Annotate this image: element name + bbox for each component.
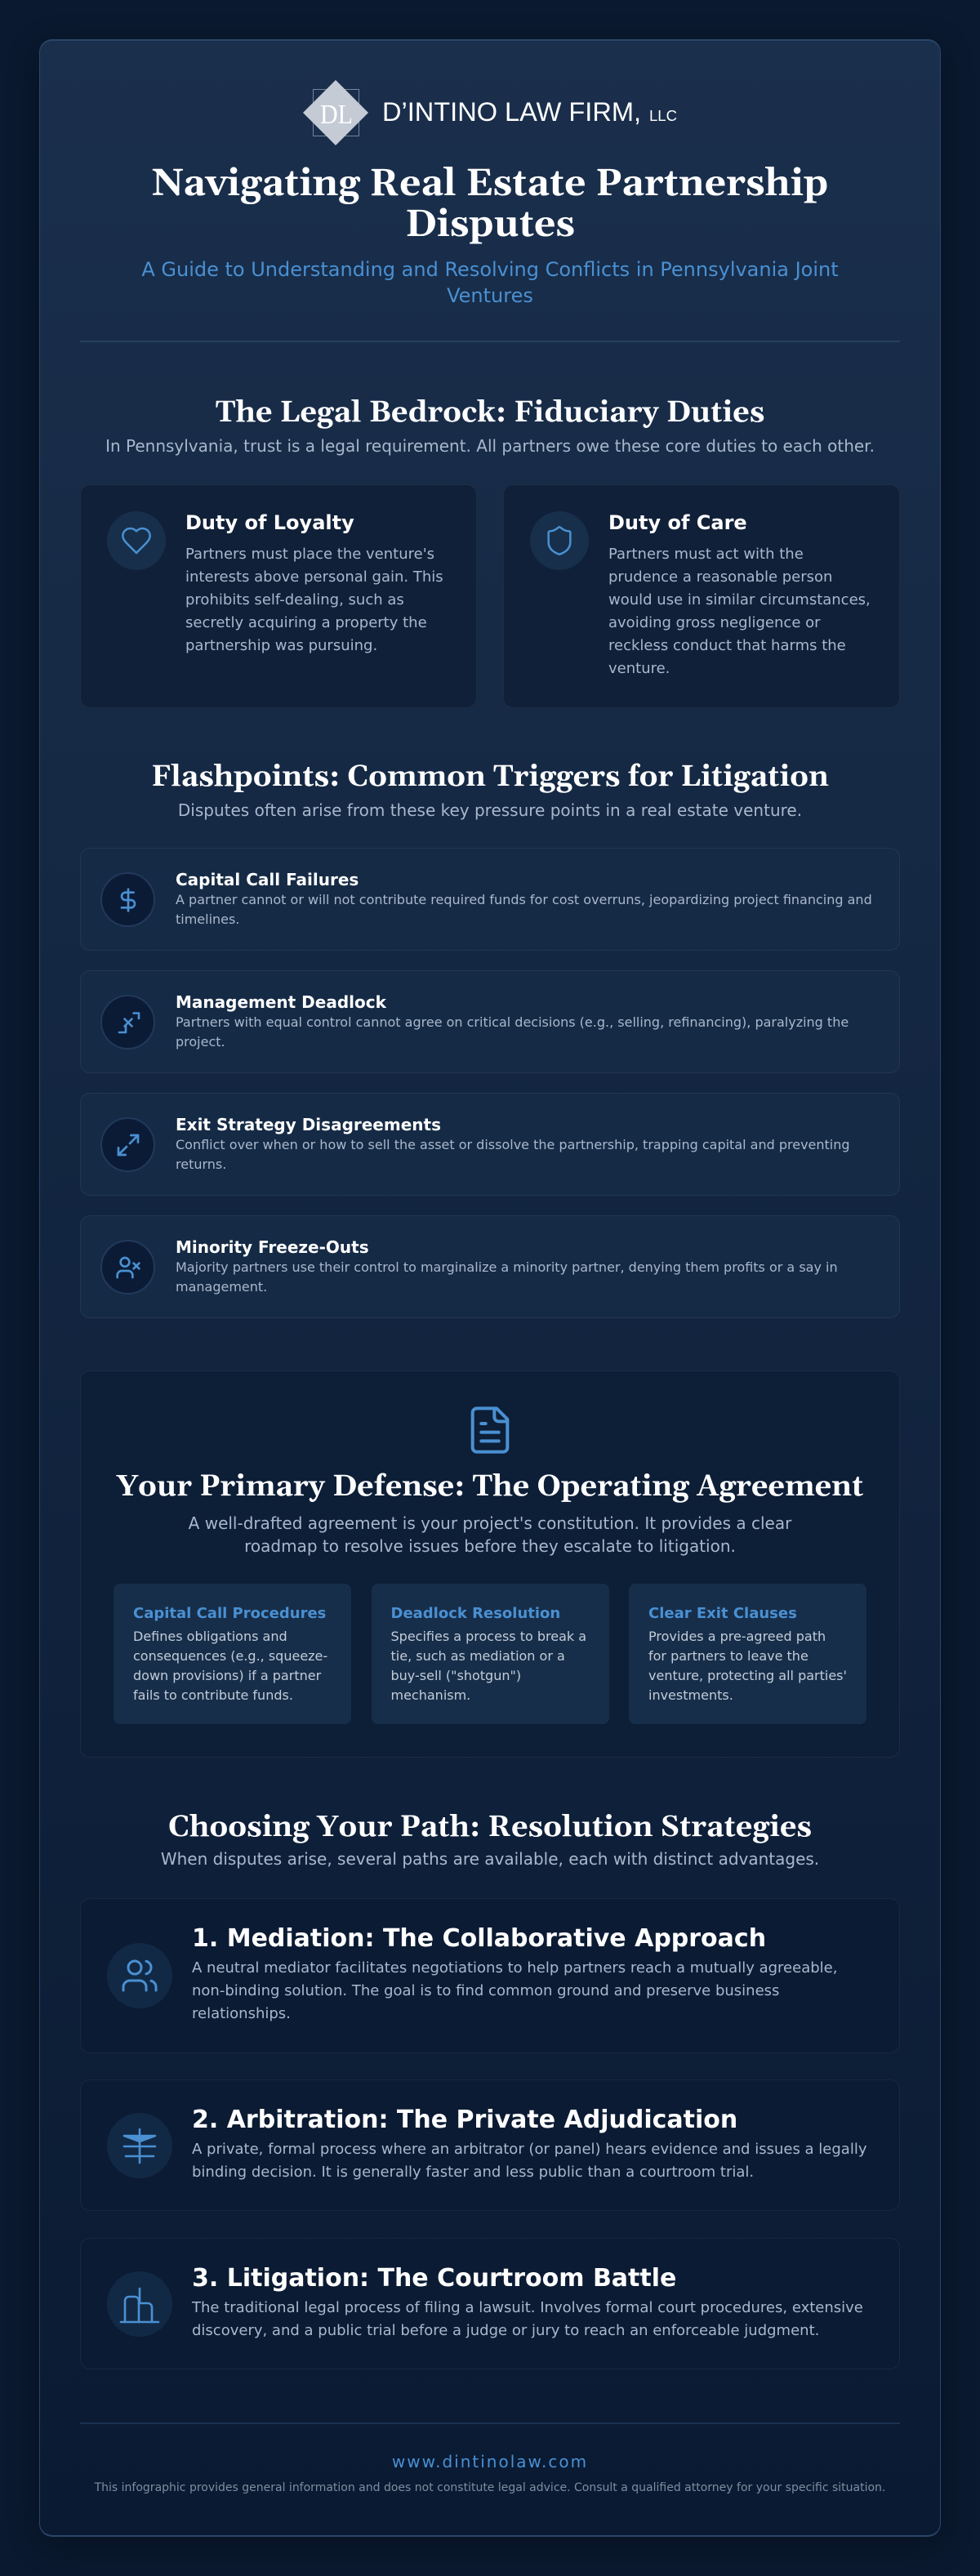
text: venture, protecting all parties': [648, 1668, 847, 1683]
section heading: resolution: Choosing Your Path: Resolution Strategies: [168, 1810, 812, 1847]
text: fails to contribute funds.: [133, 1687, 293, 1703]
text: discovery, and a public trial before a judge or jury to reach an enforceable judgment.: [192, 2322, 819, 2339]
icon: users: [107, 1943, 172, 2008]
text: A private, formal process where an arbitrator (or panel) hears evidence and issues a legally: [192, 2141, 866, 2158]
text: secretly acquiring a property the: [185, 614, 427, 631]
website link: www.dintinolaw.com: [392, 2452, 588, 2471]
icon: diagonal arrows: [100, 1117, 155, 1172]
icon: dollar: [100, 872, 155, 927]
card: deadlock resolution: [371, 1584, 609, 1724]
text: prudence a reasonable person: [608, 568, 832, 586]
heading: Deadlock Resolution: [390, 1605, 560, 1622]
text: down provisions) if a partner: [133, 1668, 321, 1683]
subtitle: [141, 258, 839, 307]
text: avoiding gross negligence or: [608, 614, 821, 631]
text: management.: [176, 1279, 267, 1295]
text: operating agreement intro: roadmap to resolve issues before they escalate to litigation.: [244, 1536, 736, 1556]
subtitle: A Guide to Understanding and Resolving Conflicts in Pennsylvania Joint: [141, 258, 839, 281]
heading: 3. Litigation: The Courtroom Battle: [192, 2264, 676, 2293]
icon: shield: [530, 511, 589, 570]
text: [648, 1629, 847, 1703]
section heading: flashpoints: Flashpoints: Common Triggers for Litigation: [151, 760, 829, 796]
text: would use in similar circumstances,: [608, 591, 871, 608]
panel: litigation: [80, 2238, 900, 2369]
text: partnership was pursuing.: [185, 637, 377, 654]
text: [133, 1629, 327, 1703]
heading: Duty of Loyalty: [185, 511, 354, 534]
text: for partners to leave the: [648, 1648, 808, 1664]
section intro: fiduciary duties: In Pennsylvania, trust is a legal requirement. All partners owe these core duties to each other.: [105, 436, 875, 456]
panel: management deadlock: [80, 970, 900, 1073]
heading: Duty of Care: [608, 511, 747, 534]
section intro: resolution: When disputes arise, several paths are available, each with distinct advantages.: [161, 1849, 819, 1869]
disclaimer: This infographic provides general information and does not constitute legal advice. Consult a qualified attorney for your specific situation.: [95, 2481, 885, 2494]
heading: Capital Call Procedures: [133, 1605, 326, 1622]
title: Navigating Real Estate Partnership: [152, 160, 828, 208]
text: relationships.: [192, 2005, 291, 2022]
heading: Clear Exit Clauses: [648, 1605, 797, 1622]
text: [176, 1014, 849, 1050]
heading: Capital Call Failures: [176, 870, 359, 889]
logo: D’INTINO LAW FIRM,: [382, 97, 641, 127]
text: Provides a pre-agreed path: [648, 1629, 826, 1644]
panel: capital call failures: [80, 848, 900, 951]
text: [176, 1259, 838, 1295]
icon: scales: [107, 2113, 172, 2178]
text: venture.: [608, 660, 670, 677]
text: reckless conduct that harms the: [608, 637, 846, 654]
text: tie, such as mediation or a: [390, 1648, 565, 1664]
text: binding decision. It is generally faster and less public than a courtroom trial.: [192, 2164, 754, 2181]
text: Conflict over when or how to sell the asset or dissolve the partnership, trapping capital and preventing: [176, 1137, 850, 1152]
heading: 1. Mediation: The Collaborative Approach: [192, 1924, 766, 1953]
text: Partners with equal control cannot agree on critical decisions (e.g., selling, refinancing), paralyzing the: [176, 1014, 849, 1030]
icon: deadlock: [100, 995, 155, 1050]
text: buy-sell ("shotgun"): [390, 1668, 521, 1683]
title: Disputes: [405, 201, 575, 249]
text: A neutral mediator facilitates negotiations to help partners reach a mutually agreeable,: [192, 1959, 837, 1977]
text: Partners must act with the: [608, 546, 804, 563]
text: Specifies a process to break a: [390, 1629, 586, 1644]
panel: mediation: [80, 1898, 900, 2053]
section heading: fiduciary duties: The Legal Bedrock: Fiduciary Duties: [216, 395, 764, 432]
icon: document: [470, 1406, 510, 1454]
text: prohibits self-dealing, such as: [185, 591, 404, 608]
heading: 2. Arbitration: The Private Adjudication: [192, 2106, 737, 2134]
text: [185, 546, 443, 654]
text: [176, 892, 872, 927]
icon: heart: [107, 511, 166, 570]
panel: duty of loyalty: [80, 484, 477, 708]
logo: DL: [320, 100, 353, 130]
text: Majority partners use their control to marginalize a minority partner, denying them profits or a say in: [176, 1259, 838, 1275]
heading: Minority Freeze-Outs: [176, 1237, 369, 1257]
text: operating agreement intro: [188, 1513, 792, 1556]
subtitle: Ventures: [447, 284, 533, 307]
icon: courthouse: [107, 2271, 172, 2337]
text: investments.: [648, 1687, 733, 1703]
title: [152, 160, 828, 249]
panel: duty of care: [503, 484, 900, 708]
text: [608, 546, 871, 677]
panel: operating agreement: [80, 1370, 900, 1758]
text: project.: [176, 1034, 225, 1050]
text: A partner cannot or will not contribute required funds for cost overruns, jeopardizing project financing and: [176, 892, 872, 907]
text: returns.: [176, 1157, 226, 1172]
logo: [303, 80, 677, 145]
card: capital call procedures: [114, 1584, 351, 1724]
text: non-binding solution. The goal is to find common ground and preserve business: [192, 1982, 779, 1999]
text: consequences (e.g., squeeze-: [133, 1648, 327, 1664]
text: [191, 2299, 863, 2339]
text: [176, 1137, 850, 1172]
heading: Management Deadlock: [176, 992, 386, 1012]
text: Defines obligations and: [133, 1629, 287, 1644]
heading: operating agreement: Your Primary Defense: The Operating Agreement: [117, 1469, 863, 1506]
icon: user x: [100, 1240, 155, 1295]
logo: LLC: [649, 108, 677, 124]
text: [390, 1629, 586, 1703]
section intro: flashpoints: Disputes often arise from these key pressure points in a real estate venture.: [178, 800, 802, 820]
panel: minority freeze-outs: [80, 1215, 900, 1318]
text: mechanism.: [390, 1687, 470, 1703]
text: [192, 2141, 866, 2181]
text: interests above personal gain. This: [185, 568, 443, 586]
heading: Exit Strategy Disagreements: [176, 1115, 441, 1134]
text: timelines.: [176, 911, 239, 927]
text: The traditional legal process of filing a lawsuit. Involves formal court procedures, extensive: [192, 2299, 863, 2316]
text: [192, 1959, 837, 2022]
card: clear exit clauses: [629, 1584, 866, 1724]
text: operating agreement intro: A well-drafted agreement is your project's constitution. It provides a clear: [189, 1513, 791, 1533]
text: Partners must place the venture's: [185, 546, 434, 563]
panel: exit strategy: [80, 1093, 900, 1196]
panel: arbitration: [80, 2079, 900, 2211]
